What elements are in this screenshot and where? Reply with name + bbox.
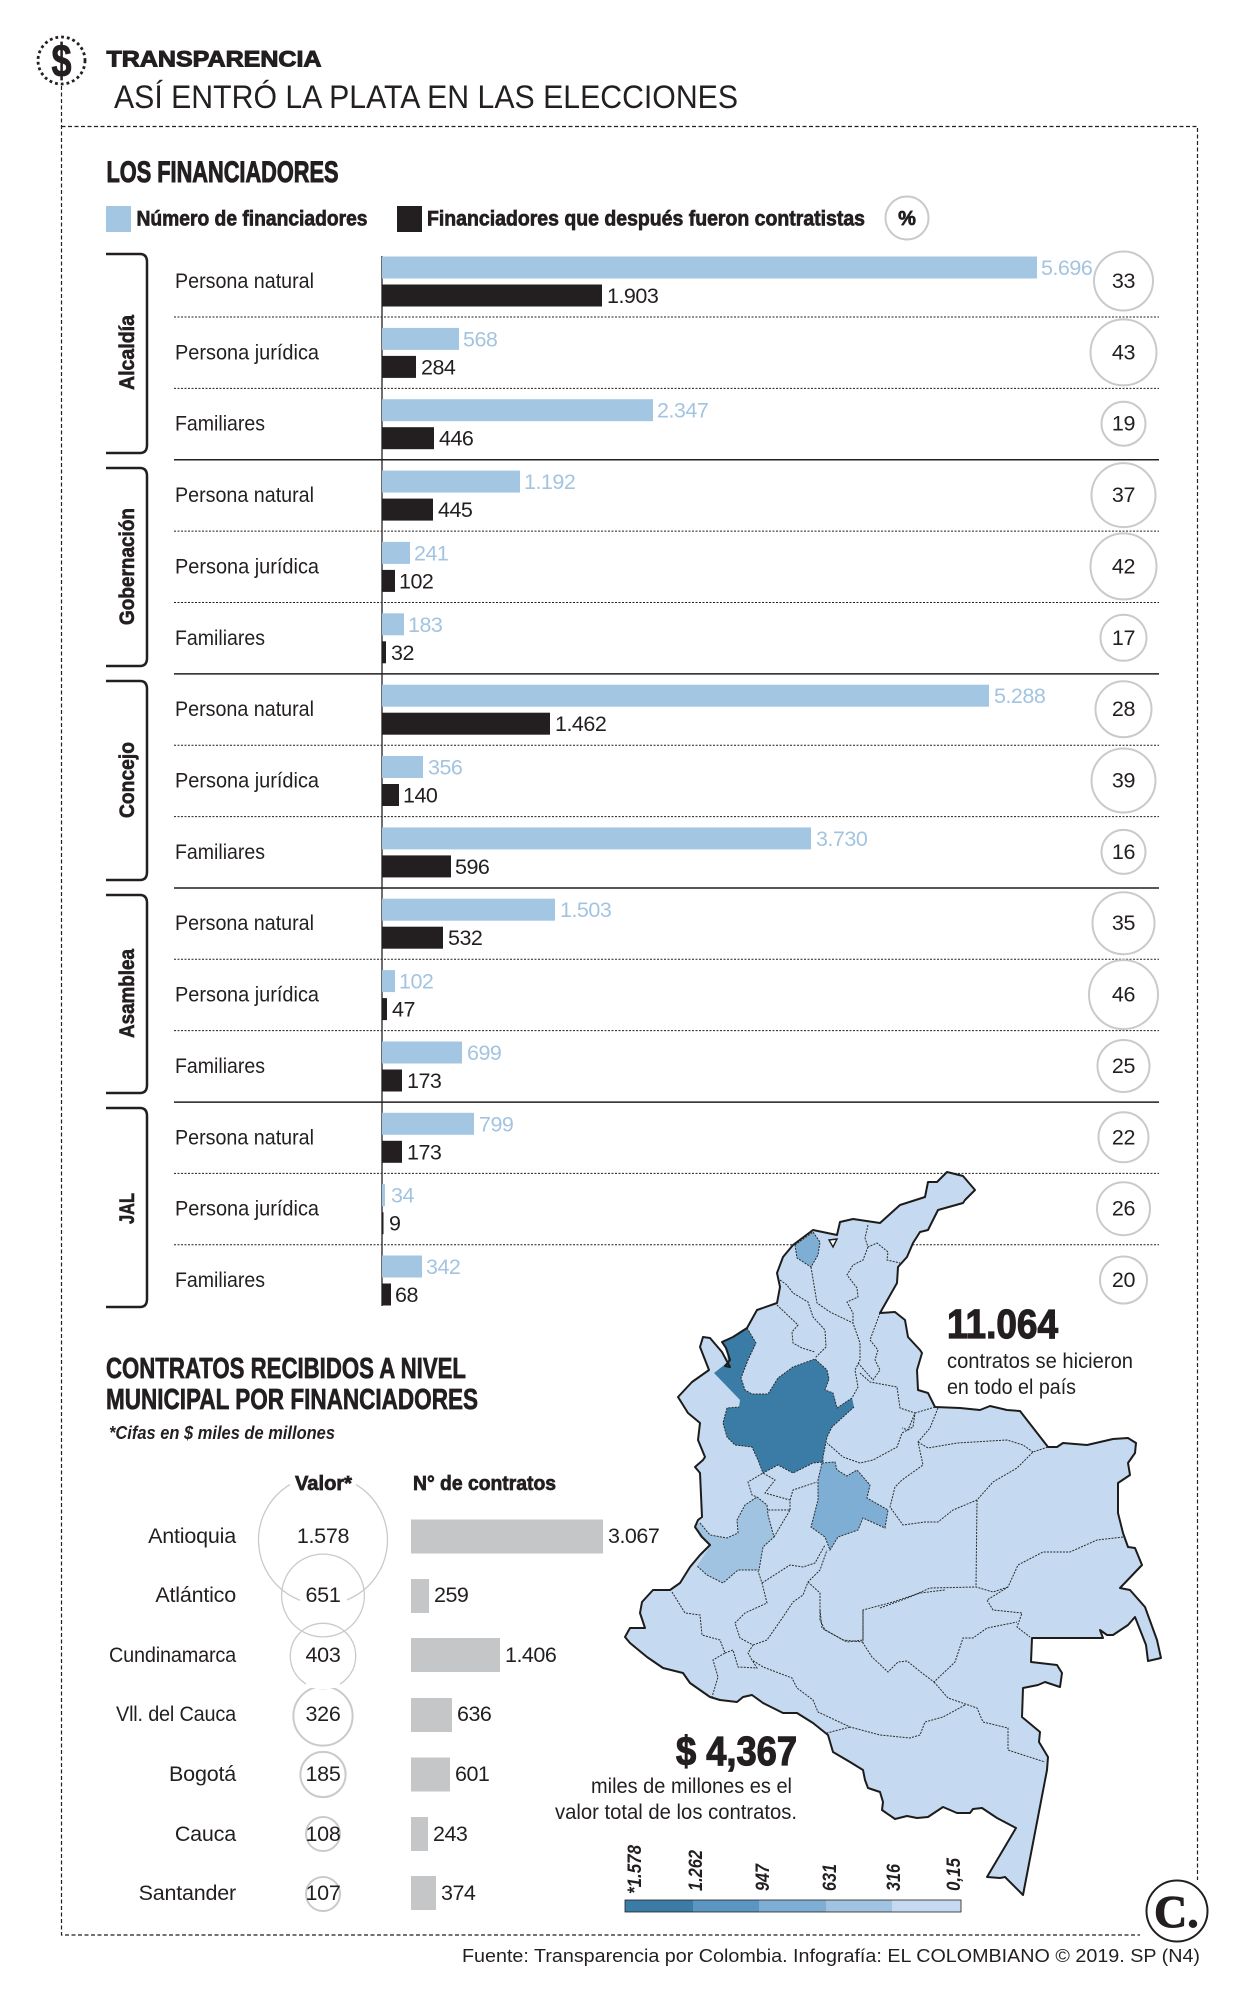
bracket: JAL: JAL xyxy=(116,1193,139,1224)
logo: C. xyxy=(1154,1886,1199,1937)
row: Asamblea persona natural: Persona natural xyxy=(175,911,314,935)
stat: contratos xyxy=(947,1301,1133,1399)
stat: valor total: valor total de los contratos. xyxy=(555,1800,797,1824)
stat: valor total: miles de millones es el xyxy=(591,1774,792,1798)
bracket: Gobernación xyxy=(106,468,147,666)
stat: valor total xyxy=(555,1728,797,1824)
row: Asamblea persona jurídica: Persona jurídica xyxy=(175,983,319,1007)
icon: dollar coin xyxy=(38,34,85,86)
row: Vll. del Cauca: Vll. del Cauca xyxy=(116,1702,236,1726)
row: Concejo persona jurídica: 39 xyxy=(1112,768,1135,792)
row: Alcaldía familiares xyxy=(175,399,1146,451)
row: JAL persona jurídica: Persona jurídica xyxy=(175,1197,319,1221)
row: Alcaldía persona natural: Persona natural xyxy=(175,269,314,293)
department borders xyxy=(672,1225,1123,1762)
row: Concejo persona natural: Persona natural xyxy=(175,697,314,721)
row: Cauca: 243 xyxy=(433,1822,468,1846)
heading: los financiadores: LOS FINANCIADORES xyxy=(106,156,338,189)
row: Concejo persona natural xyxy=(175,681,1152,737)
row: Gobernación persona jurídica: 241 xyxy=(414,541,448,565)
row: Cundinamarca: Cundinamarca xyxy=(109,1643,236,1667)
row: Asamblea persona jurídica: 102 xyxy=(399,970,433,994)
row: Concejo persona natural: 1.462 xyxy=(555,712,606,736)
row: JAL persona jurídica: 34 xyxy=(391,1184,414,1208)
row: Bogotá: 601 xyxy=(455,1762,489,1786)
stat: contratos: 11.064 xyxy=(947,1301,1058,1347)
legend: Número de financiadores xyxy=(136,208,368,230)
row: JAL persona natural: 22 xyxy=(1112,1125,1135,1149)
row: Alcaldía persona jurídica xyxy=(175,319,1156,385)
map legend: 947 xyxy=(753,1863,774,1891)
bracket: Alcaldía xyxy=(106,254,147,453)
bracket: Gobernación: Gobernación xyxy=(116,508,139,625)
row: Cundinamarca: 403 xyxy=(306,1643,341,1667)
row: JAL familiares: Familiares xyxy=(175,1268,265,1292)
row: Asamblea persona natural: 35 xyxy=(1112,911,1135,935)
row: Alcaldía persona jurídica: Persona jurídica xyxy=(175,340,319,364)
map legend: 631 xyxy=(820,1864,841,1891)
row: Asamblea familiares: 699 xyxy=(467,1041,501,1065)
row: Vll. del Cauca: 636 xyxy=(457,1702,492,1726)
legend: Financiadores que después fueron contratistas xyxy=(427,208,865,230)
row: Alcaldía familiares: 2.347 xyxy=(657,399,708,423)
valor circles xyxy=(258,1470,388,1911)
row: Gobernación familiares: 183 xyxy=(408,613,443,637)
header: valor: Valor* xyxy=(295,1473,352,1495)
bracket: Asamblea: Asamblea xyxy=(116,949,139,1038)
map legend xyxy=(625,1845,965,1912)
row: Bogotá: 185 xyxy=(306,1762,341,1786)
bracket: Concejo: Concejo xyxy=(116,742,139,818)
row: Atlántico: Atlántico xyxy=(155,1583,236,1607)
row: JAL familiares xyxy=(175,1255,1147,1307)
row: Gobernación persona natural: 1.192 xyxy=(524,470,575,494)
bracket: Asamblea xyxy=(106,895,147,1093)
row: Gobernación familiares xyxy=(175,613,1146,665)
row: Santander: 107 xyxy=(306,1881,340,1905)
stat: contratos: en todo el país xyxy=(947,1375,1076,1399)
row: Gobernación persona natural xyxy=(175,463,1156,527)
map legend: 316 xyxy=(884,1864,905,1891)
map legend: *1.578 xyxy=(625,1845,646,1894)
row: JAL persona natural: 173 xyxy=(407,1140,442,1164)
row: Gobernación persona jurídica: 42 xyxy=(1112,554,1135,578)
row: Cundinamarca xyxy=(109,1638,557,1672)
row: JAL persona jurídica: 9 xyxy=(389,1212,400,1236)
row: Vll. del Cauca: 326 xyxy=(306,1702,341,1726)
row: Concejo persona jurídica: Persona jurídica xyxy=(175,768,319,792)
section kicker: TRANSPARENCIA xyxy=(106,46,322,72)
row: Asamblea persona natural: 1.503 xyxy=(560,898,612,922)
row: Concejo persona natural: 5.288 xyxy=(994,684,1046,708)
row: Concejo familiares: 16 xyxy=(1112,840,1135,864)
row: Asamblea persona jurídica xyxy=(175,960,1158,1029)
row: Antioquia: 1.578 xyxy=(297,1524,349,1548)
note: cifras: *Cifas en $ miles de millones xyxy=(109,1423,335,1443)
row: Cauca: Cauca xyxy=(175,1822,236,1846)
row: Gobernación persona jurídica: 102 xyxy=(399,569,433,593)
row: JAL familiares: 68 xyxy=(395,1283,418,1307)
row: Antioquia xyxy=(148,1520,659,1554)
row: Gobernación persona natural: 445 xyxy=(438,498,473,522)
row: Asamblea familiares: 25 xyxy=(1112,1054,1135,1078)
row: Asamblea persona jurídica: 47 xyxy=(392,998,415,1022)
row: JAL familiares: 20 xyxy=(1112,1268,1135,1292)
row: Asamblea familiares: 173 xyxy=(407,1069,442,1093)
row: Alcaldía persona natural: 5.696 xyxy=(1041,256,1093,280)
lagoon xyxy=(829,1239,837,1247)
region: Atlántico xyxy=(795,1232,820,1267)
stat: contratos: contratos se hicieron xyxy=(947,1349,1133,1373)
icon: dollar coin: $ xyxy=(52,34,72,86)
row: Concejo familiares: 3.730 xyxy=(816,827,868,851)
header: contratos: N° de contratos xyxy=(413,1473,556,1495)
region: Valle del Cauca xyxy=(694,1497,774,1583)
row: Asamblea persona jurídica: 46 xyxy=(1112,983,1135,1007)
row: Asamblea familiares: Familiares xyxy=(175,1054,265,1078)
row: Concejo familiares xyxy=(175,827,1146,879)
row: Concejo familiares: Familiares xyxy=(175,840,265,864)
row: JAL persona natural xyxy=(175,1112,1148,1164)
heading: contratos: CONTRATOS RECIBIDOS A NIVEL xyxy=(106,1353,466,1385)
row: Alcaldía persona jurídica: 43 xyxy=(1112,340,1135,364)
bracket: Alcaldía: Alcaldía xyxy=(116,315,139,390)
map base xyxy=(625,1172,1161,1895)
row: Alcaldía persona jurídica: 284 xyxy=(421,355,456,379)
axis xyxy=(381,256,383,1306)
map of Colombia xyxy=(625,1172,1161,1895)
row: Gobernación persona jurídica xyxy=(175,533,1156,599)
row: Bogotá: Bogotá xyxy=(169,1762,236,1786)
row: JAL familiares: 342 xyxy=(426,1255,460,1279)
row: Alcaldía familiares: Familiares xyxy=(175,412,265,436)
row: Gobernación familiares: 32 xyxy=(391,641,414,665)
stat: valor total: $ 4,367 xyxy=(676,1728,797,1774)
row: Gobernación persona jurídica: Persona jurídica xyxy=(175,554,319,578)
row: Santander: Santander xyxy=(139,1881,236,1905)
row: JAL persona natural: Persona natural xyxy=(175,1125,314,1149)
row: Gobernación familiares: Familiares xyxy=(175,626,265,650)
row: Gobernación familiares: 17 xyxy=(1112,626,1135,650)
row: Bogotá xyxy=(169,1758,489,1792)
bracket: Concejo xyxy=(106,681,147,880)
row: Asamblea persona natural xyxy=(175,892,1154,954)
row: Gobernación persona natural: 37 xyxy=(1112,483,1135,507)
row: Asamblea persona natural: 532 xyxy=(448,926,482,950)
row: Atlántico xyxy=(155,1579,468,1613)
row: Atlántico: 259 xyxy=(434,1583,468,1607)
row: Concejo persona jurídica: 140 xyxy=(403,784,438,808)
row: Concejo persona jurídica xyxy=(175,748,1156,812)
region: Cundinamarca xyxy=(811,1462,888,1550)
row: Concejo familiares: 596 xyxy=(455,855,490,879)
row: JAL persona jurídica xyxy=(175,1182,1150,1236)
chart: financiadores bar rows xyxy=(106,252,1159,1307)
row: Alcaldía familiares: 446 xyxy=(439,427,474,451)
row: JAL persona jurídica: 26 xyxy=(1112,1197,1135,1221)
row: Cundinamarca: 1.406 xyxy=(505,1643,557,1667)
row: Antioquia: 3.067 xyxy=(608,1524,659,1548)
row: Asamblea familiares xyxy=(175,1040,1150,1093)
row: Vll. del Cauca xyxy=(116,1698,492,1732)
heading: contratos: MUNICIPAL POR FINANCIADORES xyxy=(106,1384,478,1416)
source line: Fuente: Transparencia por Colombia. Infografía: EL COLOMBIANO © 2019. SP (N4) xyxy=(462,1945,1200,1966)
row: Atlántico: 651 xyxy=(306,1583,340,1607)
row: Alcaldía persona jurídica: 568 xyxy=(463,327,498,351)
row: Antioquia: Antioquia xyxy=(148,1524,236,1548)
row: Concejo persona jurídica: 356 xyxy=(428,756,463,780)
row: Alcaldía persona natural xyxy=(175,252,1153,310)
heading: contratos xyxy=(106,1353,478,1416)
title: ASÍ ENTRÓ LA PLATA EN LAS ELECCIONES xyxy=(114,79,738,115)
row: Gobernación persona natural: Persona natural xyxy=(175,483,314,507)
map legend: 0,15 xyxy=(944,1858,965,1891)
row: Alcaldía persona natural: 33 xyxy=(1112,269,1135,293)
logo xyxy=(1146,1880,1208,1942)
row: Santander: 374 xyxy=(441,1881,476,1905)
row: Concejo persona natural: 28 xyxy=(1112,697,1135,721)
row: Santander xyxy=(139,1876,476,1910)
map coastline xyxy=(625,1172,1161,1895)
row: Alcaldía persona natural: 1.903 xyxy=(607,284,659,308)
row: Alcaldía familiares: 19 xyxy=(1112,412,1135,436)
legend xyxy=(106,196,928,240)
legend: % xyxy=(898,208,916,230)
row: Cauca: 108 xyxy=(306,1822,341,1846)
map legend: 1.262 xyxy=(686,1850,707,1891)
row: JAL persona natural: 799 xyxy=(479,1112,513,1136)
chart: contratos table xyxy=(109,1470,659,1911)
region: Antioquia and Urabá xyxy=(714,1328,854,1473)
bracket: JAL xyxy=(106,1108,147,1307)
row: Cauca xyxy=(175,1817,468,1851)
separators xyxy=(174,317,1159,1245)
